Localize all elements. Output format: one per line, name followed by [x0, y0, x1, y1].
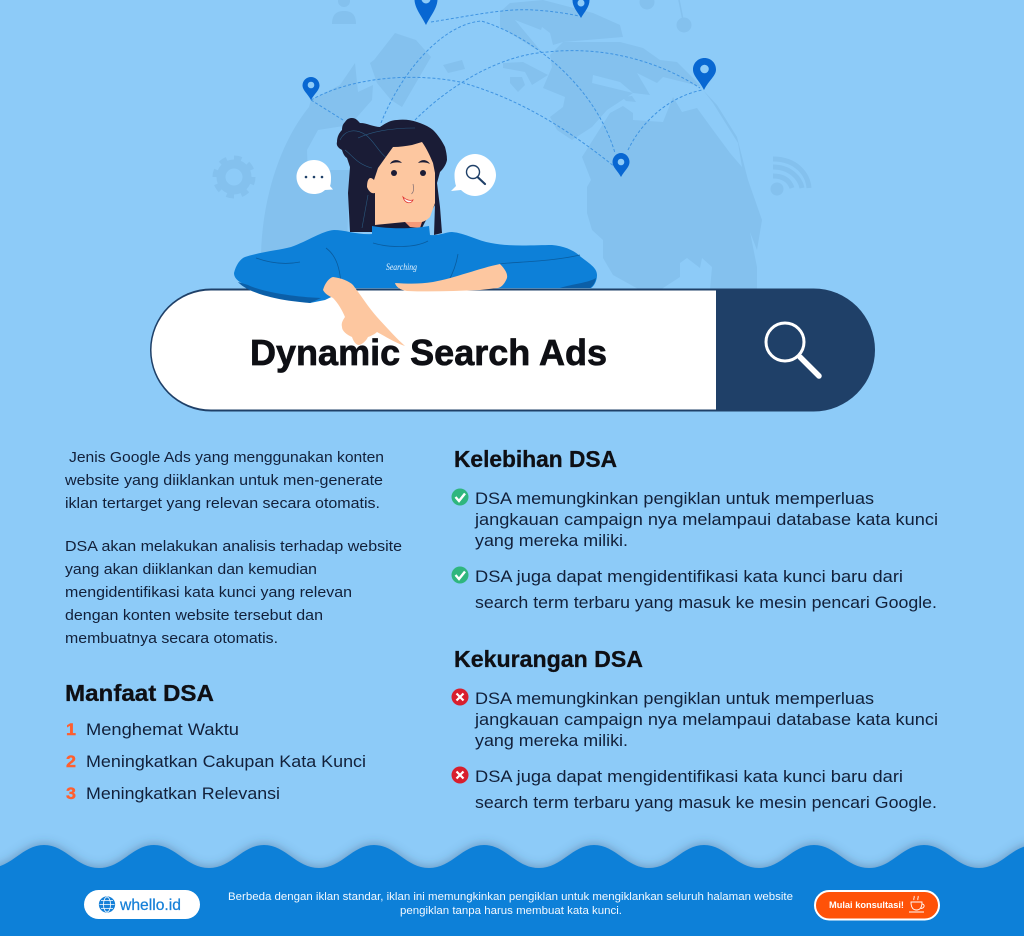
list: disadvantages: DSA juga dapat mengidentifikasi kata kunci baru dari — [475, 767, 903, 786]
list: advantages: jangkauan campaign nya melampaui database kata kunci — [474, 510, 938, 529]
heading: Kelebihan DSA: Kelebihan DSA — [454, 446, 617, 472]
list: benefits: 2 — [66, 752, 76, 771]
eyes and brows — [390, 160, 430, 176]
logo pill: whello.id: whello.id — [119, 897, 181, 914]
button: Mulai konsultasi — [815, 891, 939, 920]
dashed connection routes — [311, 10, 702, 167]
icon: check second — [452, 566, 468, 584]
sweater — [234, 226, 597, 303]
search bar — [150, 288, 875, 412]
logo pill: whello.id — [84, 890, 200, 919]
text block: description: DSA akan melakukan analisis terhadap website — [65, 538, 402, 555]
footer note: pengiklan tanpa harus membuat kata kunci. — [400, 905, 622, 917]
map pins — [302, 0, 716, 177]
text block: description: iklan tertarget yang relevan secara otomatis. — [65, 495, 380, 512]
list: advantages: search term terbaru yang masuk ke mesin pencari Google. — [475, 593, 937, 612]
icon: coffee cup — [909, 896, 924, 912]
footer wave band — [0, 845, 1024, 936]
hair — [337, 118, 447, 235]
list: disadvantages: DSA memungkinkan pengiklan untuk memperluas — [475, 689, 874, 708]
text block: description: dengan konten website tersebut dan — [65, 607, 323, 624]
icon: web globe — [100, 897, 114, 912]
text block: description: membuatnya secara otomatis. — [65, 630, 278, 647]
icon: cross second — [452, 766, 468, 784]
footer note — [228, 891, 793, 917]
speech bubble: typing — [296, 160, 333, 194]
chest label: Searching — [386, 263, 417, 273]
list: benefits: 1 — [66, 720, 76, 739]
background icon: gear — [215, 158, 253, 196]
list: disadvantages: yang mereka miliki. — [475, 731, 628, 750]
nose and smile — [403, 184, 414, 203]
globe illustration — [261, 0, 762, 290]
background icon: wifi signal — [770, 159, 809, 196]
background icon: person — [332, 0, 356, 24]
heading: Kekurangan DSA: Kekurangan DSA — [454, 646, 643, 672]
text block: description: website yang diiklankan untuk men-generate — [64, 472, 383, 489]
list: advantages: DSA juga dapat mengidentifikasi kata kunci baru dari — [475, 567, 903, 586]
title: Dynamic Search Ads — [250, 332, 607, 373]
heading: Manfaat DSA: Manfaat DSA — [65, 680, 214, 706]
footer note: Berbeda dengan iklan standar, iklan ini memungkinkan pengiklan untuk mengiklankan seluruh halaman website — [228, 891, 793, 903]
speech bubble: search — [451, 154, 496, 196]
right arm — [395, 264, 507, 291]
list: benefits: Meningkatkan Relevansi — [86, 784, 280, 803]
button: Mulai konsultasi: Mulai konsultasi! — [829, 900, 904, 911]
list: disadvantages: jangkauan campaign nya melampaui database kata kunci — [474, 710, 938, 729]
list: disadvantages — [452, 688, 938, 812]
list: benefits: 3 — [66, 784, 76, 803]
face — [367, 142, 435, 225]
background icon: network nodes — [640, 0, 692, 32]
list: benefits — [66, 720, 366, 803]
text block: description: Jenis Google Ads yang menggunakan konten — [69, 449, 384, 466]
list: advantages — [452, 488, 938, 612]
person illustration — [234, 118, 597, 346]
neck shadow — [405, 222, 422, 228]
list: advantages: DSA memungkinkan pengiklan untuk memperluas — [475, 489, 874, 508]
text block: description — [64, 449, 402, 647]
list: benefits: Meningkatkan Cakupan Kata Kunci — [86, 752, 366, 771]
hair strands — [340, 128, 415, 228]
pointing hand — [323, 277, 405, 346]
icon: check — [452, 488, 468, 506]
text block: description: yang akan diiklankan dan kemudian — [65, 561, 317, 578]
text block: description: mengidentifikasi kata kunci yang relevan — [65, 584, 352, 601]
list: advantages: yang mereka miliki. — [475, 531, 628, 550]
list: disadvantages: search term terbaru yang masuk ke mesin pencari Google. — [475, 793, 937, 812]
sweater shading — [256, 241, 580, 284]
list: benefits: Menghemat Waktu — [86, 720, 239, 739]
icon: search magnifier — [766, 323, 819, 376]
icon: cross — [452, 688, 468, 706]
